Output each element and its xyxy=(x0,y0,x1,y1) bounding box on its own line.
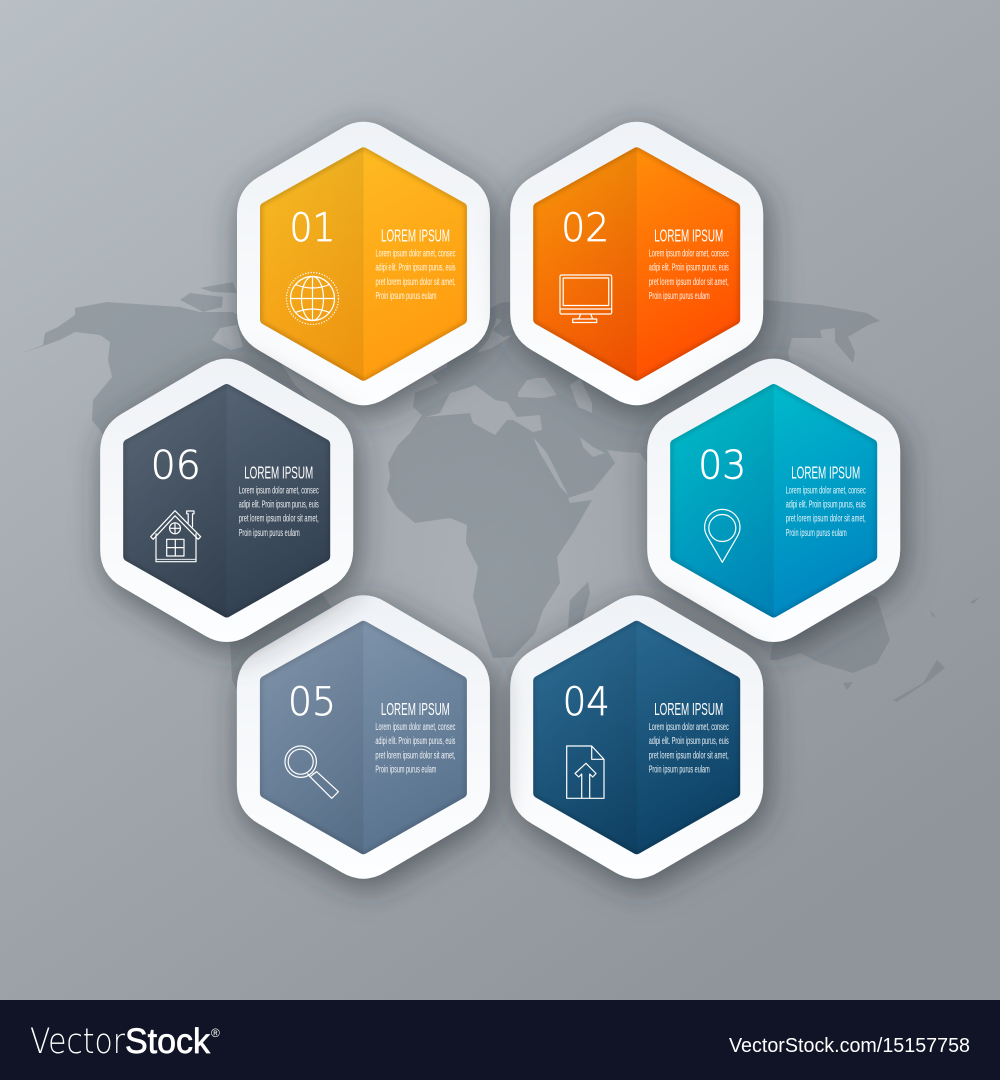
icon: globe xyxy=(286,272,338,324)
heading 06: LOREM IPSUM xyxy=(244,462,313,482)
text block 04: Lorem ipsum dolor amet, consec xyxy=(649,722,729,733)
icon: map pin xyxy=(705,509,740,562)
text block 01: Lorem ipsum dolor amet, consec xyxy=(376,248,456,260)
heading 04: LOREM IPSUM xyxy=(654,699,723,719)
image id: VectorStock.com/15157758 xyxy=(729,1035,970,1057)
heading 01: LOREM IPSUM xyxy=(381,226,450,246)
number 01: 01 xyxy=(290,206,336,251)
panel: hexagon 03 xyxy=(647,359,900,642)
icon: magnifier xyxy=(285,746,338,798)
text block 03: Proin ipsum purus eulam xyxy=(786,528,847,539)
logo: VectorStock: Stock xyxy=(125,1022,210,1061)
text block 03 xyxy=(786,485,866,539)
text block 01: Proin ipsum purus eulam xyxy=(376,291,436,302)
text block 03: adipi elit. Proin ipsum purus, euis xyxy=(786,499,866,510)
number 04: 04 xyxy=(563,680,610,725)
icon: file upload xyxy=(567,746,604,798)
text block 02: pret lorem ipsum dolor sit amet, xyxy=(649,277,729,288)
heading 02: LOREM IPSUM xyxy=(654,226,723,246)
text block 04 xyxy=(649,722,729,776)
text block 03: pret lorem ipsum dolor sit amet, xyxy=(786,514,866,525)
text block 02 xyxy=(649,248,729,302)
panel: hexagon 04 xyxy=(510,595,763,879)
text block 03: Lorem ipsum dolor amet, consec xyxy=(786,485,866,496)
panel: hexagon 02 xyxy=(510,122,763,405)
number 03: 03 xyxy=(698,443,746,488)
panel: hexagon 01 xyxy=(237,122,490,405)
text block 06 xyxy=(239,485,319,539)
text block 06: Lorem ipsum dolor amet, consec xyxy=(239,485,319,496)
text block 04: pret lorem ipsum dolor sit amet, xyxy=(649,750,729,761)
logo: VectorStock: ® xyxy=(211,1026,220,1040)
text block 02: adipi elit. Proin ipsum purus, euis xyxy=(649,263,729,274)
panel: hexagon 06 xyxy=(100,359,353,642)
text block 06: pret lorem ipsum dolor sit amet, xyxy=(239,514,319,525)
panel: hexagon 05 xyxy=(237,595,490,879)
text block 04: adipi elit. Proin ipsum purus, euis xyxy=(649,736,729,747)
text block 05: Lorem ipsum dolor amet, consec xyxy=(375,722,455,733)
logo: VectorStock xyxy=(30,1022,220,1062)
text block 05 xyxy=(375,722,455,776)
text block 04: Proin ipsum purus eulam xyxy=(649,765,710,776)
text block 06: adipi elit. Proin ipsum purus, euis xyxy=(239,499,319,510)
number 02: 02 xyxy=(561,206,609,251)
world map xyxy=(22,282,980,720)
text block 02: Lorem ipsum dolor amet, consec xyxy=(649,248,729,260)
heading 03: LOREM IPSUM xyxy=(791,462,860,482)
number 05: 05 xyxy=(288,680,336,725)
text block 01: pret lorem ipsum dolor sit amet, xyxy=(376,277,456,288)
text block 02: Proin ipsum purus eulam xyxy=(649,291,710,302)
icon: monitor xyxy=(560,275,612,322)
footer bar xyxy=(0,1000,1000,1080)
number 06: 06 xyxy=(151,443,201,488)
icon: house xyxy=(151,511,201,562)
text block 05: adipi elit. Proin ipsum purus, euis xyxy=(375,736,455,747)
text block 06: Proin ipsum purus eulam xyxy=(239,528,300,539)
text block 05: Proin ipsum purus eulam xyxy=(375,765,436,776)
text block 05: pret lorem ipsum dolor sit amet, xyxy=(375,750,455,761)
logo: VectorStock: Vector xyxy=(30,1022,126,1062)
heading 05: LOREM IPSUM xyxy=(381,699,450,719)
text block 01 xyxy=(376,248,456,302)
text block 01: adipi elit. Proin ipsum purus, euis xyxy=(376,263,456,274)
